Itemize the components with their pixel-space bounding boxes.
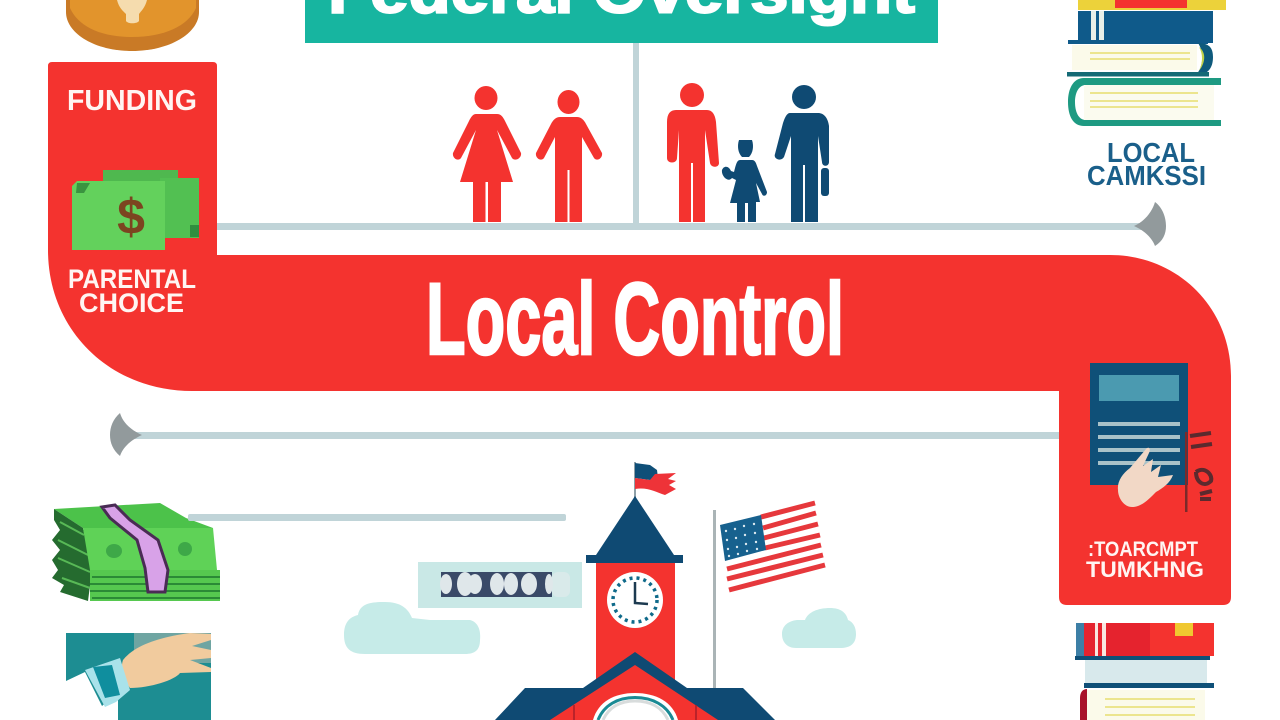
icon: tower flag (634, 462, 676, 498)
icon: book stack bottom right (1075, 623, 1214, 720)
person: child in blue (722, 140, 767, 222)
label: independent funding: TUMKHNG (1086, 557, 1204, 582)
icon: clock (607, 572, 663, 628)
label: pill badge with obscured text (418, 562, 582, 608)
label: funding: FUNDING (67, 85, 197, 117)
icon: document with hand (1090, 363, 1212, 512)
tower roof (596, 496, 674, 555)
tower body (596, 563, 675, 693)
icon: american flag on pole (713, 503, 825, 688)
connector: short line behind money (188, 514, 566, 521)
gable wall lines (574, 705, 696, 720)
person: adult in blue with briefcase (775, 85, 829, 222)
icon: banded money stack (52, 503, 220, 601)
person: adult in red (536, 90, 602, 222)
arched window (593, 693, 678, 720)
icon: left cloud (344, 602, 480, 654)
icon: hand over teal folder (66, 633, 211, 720)
main roof (495, 652, 775, 720)
illustration: school building (495, 462, 775, 720)
label: parental choice (68, 264, 196, 318)
label: local campus (1087, 137, 1206, 191)
arrow: lower connector pointing left (110, 413, 1059, 456)
label: local campus: CAMKSSI (1087, 160, 1206, 191)
icon: right cloud (782, 608, 856, 648)
heading: local control: Local Control (426, 262, 844, 376)
person: tall adult in red (667, 83, 719, 222)
icon: green cash: $ (117, 189, 145, 245)
ribbon: red local control band (48, 62, 1231, 605)
icon: book stack top right (1067, 0, 1226, 126)
arrow: upper connector pointing right (217, 202, 1166, 246)
label: parental choice: PARENTAL (68, 264, 196, 294)
label: local campus: LOCAL (1107, 137, 1195, 168)
icon: green cash (72, 170, 199, 250)
connector: vertical line from banner (633, 43, 639, 224)
label: independent funding: :TOARCMPT (1088, 538, 1198, 561)
front gable (550, 665, 718, 720)
people group (453, 83, 829, 222)
title banner: federal oversight (305, 0, 938, 43)
icon: coin lightbulb badge (66, 0, 199, 51)
label: independent funding (1086, 538, 1204, 582)
label: parental choice: CHOICE (79, 288, 184, 318)
person: woman in dress (453, 86, 521, 222)
